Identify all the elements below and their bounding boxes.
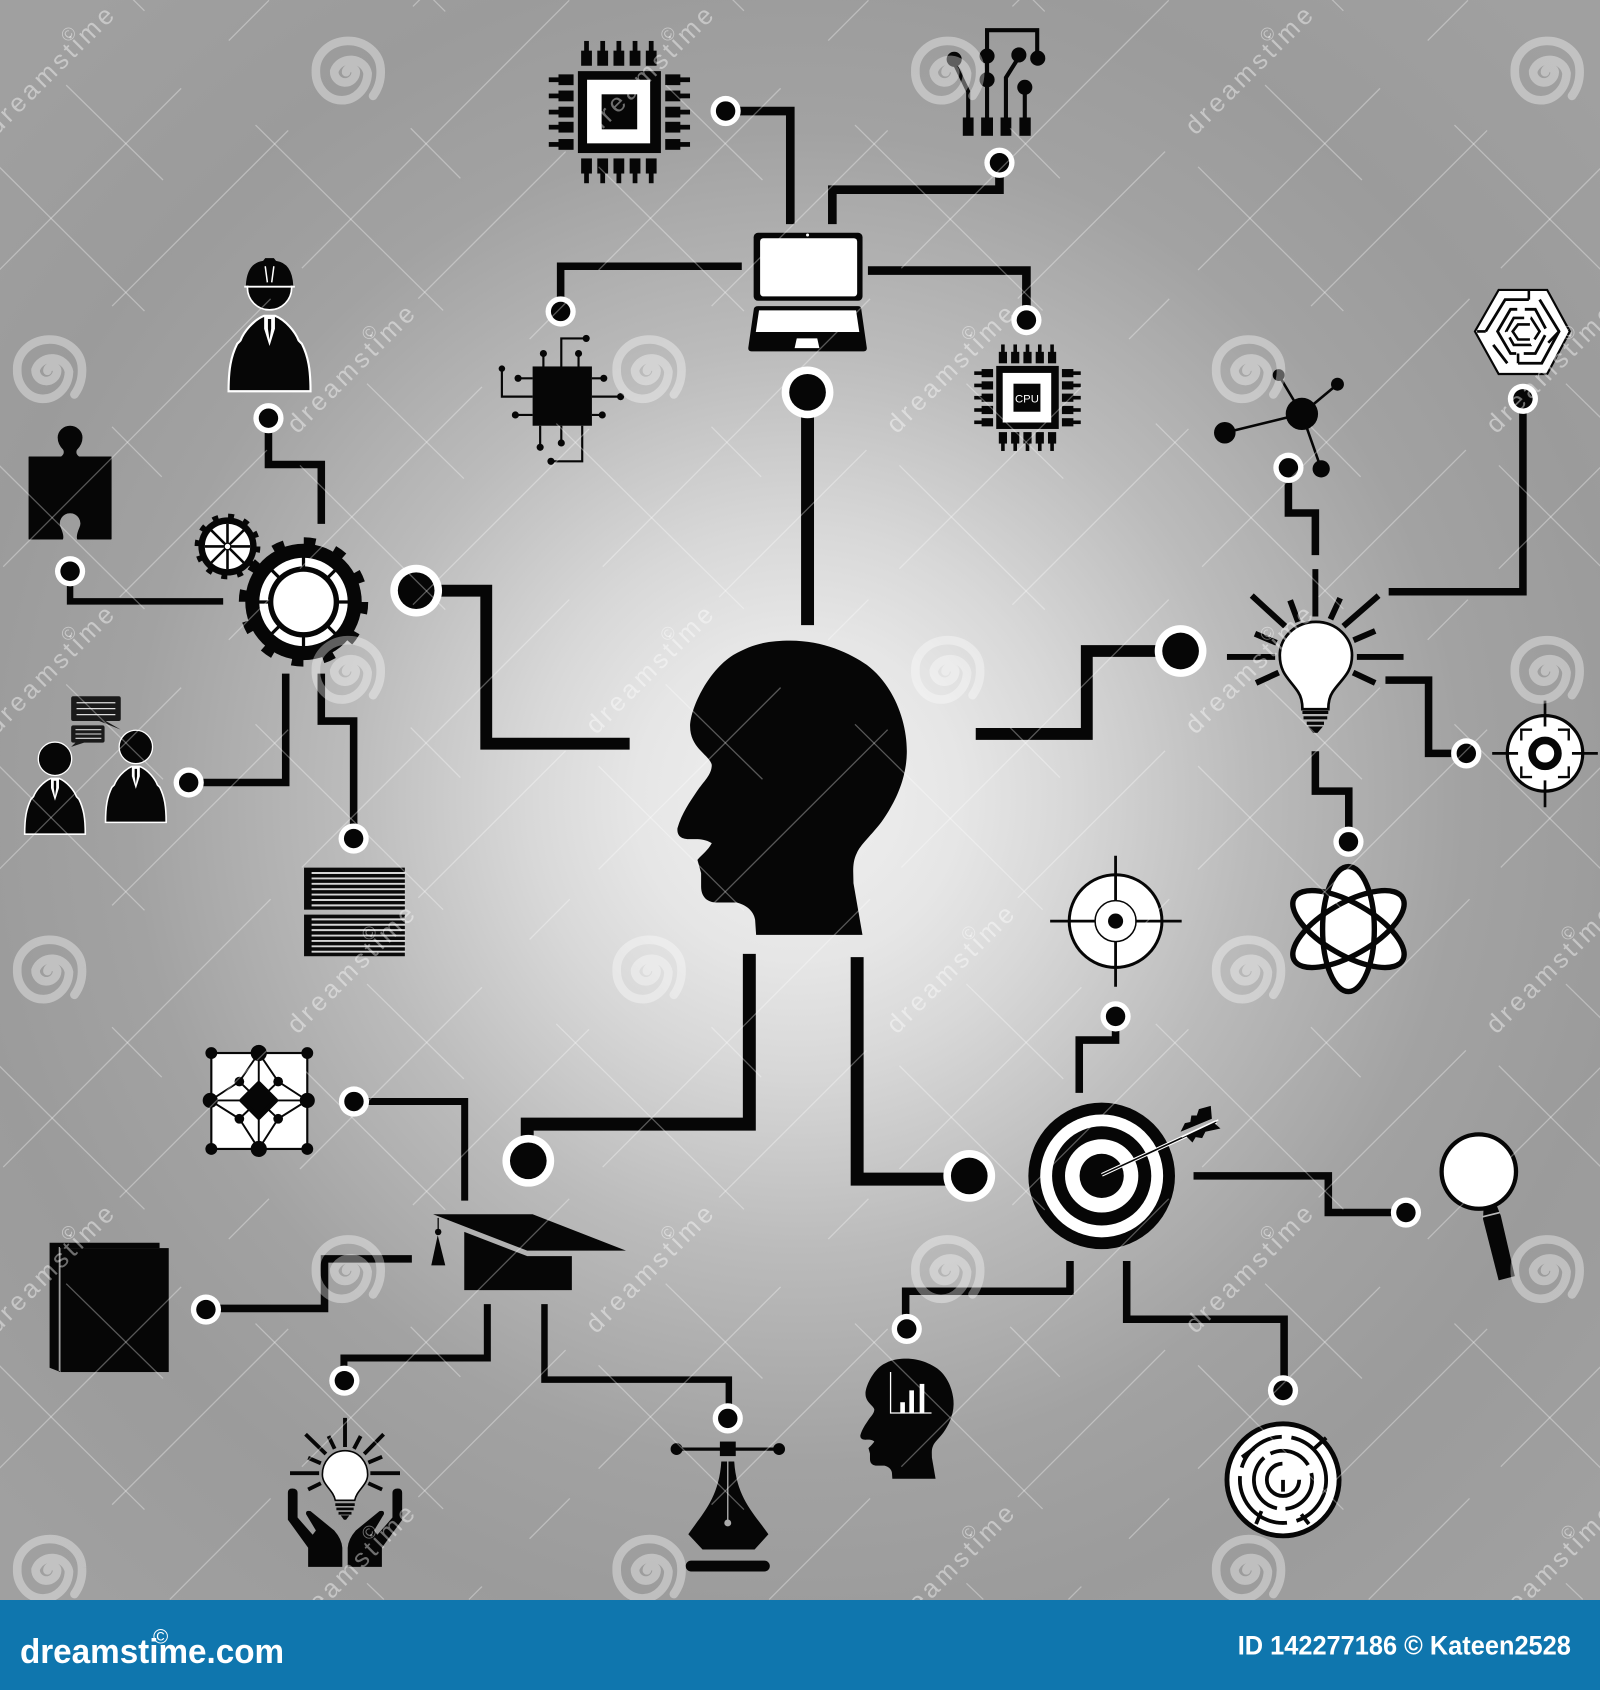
icon: crosshair (1050, 856, 1182, 987)
icon: CPU chip: CPU (1015, 394, 1039, 406)
icon: head with bar chart (860, 1359, 954, 1479)
watermark: dreamstime text: © (656, 1220, 680, 1245)
icon: two people talking (25, 696, 166, 834)
icon: atom (1281, 867, 1416, 992)
icon: CPU chip (974, 344, 1081, 451)
icon: engineer with hard hat (229, 258, 311, 391)
watermark: dreamstime text: © (357, 920, 382, 945)
watermark: dreamstime text: © (1255, 621, 1280, 645)
watermark: dreamstime text: © (1255, 1220, 1280, 1245)
watermark: dreamstime text: dreamstime (881, 1500, 1020, 1638)
graduation cap connectors (191, 1086, 743, 1433)
main connector: head to laptop (782, 366, 833, 625)
laptop connectors (546, 96, 1042, 335)
watermark: dreamstime text: © (956, 920, 981, 945)
icon: bullseye with arrow (1028, 1103, 1220, 1249)
watermark: dreamstime text: dreamstime (282, 300, 421, 439)
watermark: dreamstime text: © (656, 21, 680, 46)
icon: processor with nodes (499, 335, 624, 465)
icon: large microchip (549, 41, 690, 183)
icon: atomic lattice (203, 1045, 315, 1157)
icon: circuit board traces (947, 30, 1045, 136)
icon: fountain pen nib (671, 1442, 785, 1571)
watermark: dreamstime text: dreamstime (581, 2, 719, 140)
watermark: dreamstime text: © (357, 1519, 382, 1544)
main connector: head to light bulb (976, 625, 1206, 734)
icon: magnifying glass (1442, 1134, 1516, 1280)
watermark: dreamstime text: © (956, 320, 981, 345)
icon: closed book (50, 1243, 169, 1372)
watermark: dreamstime text: dreamstime (1180, 2, 1319, 140)
gear connectors (55, 403, 369, 854)
watermark: dreamstime text: dreamstime (1180, 1200, 1319, 1339)
icon: idea light bulb with rays (1227, 569, 1404, 733)
watermark: dreamstime text: © (1556, 1519, 1581, 1544)
watermark: dreamstime text: dreamstime (282, 900, 421, 1039)
watermark: dreamstime text: © (56, 21, 81, 46)
footer credit: ID 142277186 © Kateen2528 (1238, 1630, 1571, 1660)
watermark: dreamstime text: © (1556, 920, 1581, 945)
watermark: dreamstime text: © (357, 320, 382, 345)
icon: molecule (1214, 369, 1344, 477)
watermark: dreamstime text: © (56, 621, 81, 645)
footer bar (0, 1600, 1600, 1690)
icon: puzzle piece (29, 426, 111, 539)
watermark: dreamstime text: dreamstime (881, 300, 1020, 439)
watermark: dreamstime text: dreamstime (581, 1200, 719, 1339)
icon: stacked books (304, 868, 405, 956)
icon: gears (197, 516, 364, 663)
footer logo mark: © (153, 1626, 168, 1649)
watermark: dreamstime text: © (1556, 320, 1581, 345)
watermark: dreamstime text: © (656, 621, 680, 645)
watermark: dreamstime text: dreamstime (581, 601, 719, 739)
main connector: head to bullseye (857, 957, 995, 1202)
icon: hands holding light bulb (288, 1418, 402, 1567)
watermark: dreamstime text: dreamstime (881, 900, 1020, 1039)
icon: target reticle (1492, 701, 1598, 807)
watermark: dreamstime text: © (1255, 21, 1280, 46)
watermark: dreamstime text: dreamstime (282, 1500, 421, 1638)
central head silhouette (677, 641, 907, 935)
main connector: head to graduation cap (502, 954, 749, 1187)
footer logo: dreamstime.com (20, 1633, 284, 1671)
main connector: head to gears (390, 565, 630, 744)
watermark: dreamstime text: dreamstime (1180, 601, 1319, 739)
icon: laptop (748, 233, 867, 351)
light bulb connectors (1273, 384, 1538, 857)
watermark: dreamstime text: © (56, 1220, 81, 1245)
icon: circular maze (1227, 1424, 1339, 1536)
watermark: dreamstime text: © (956, 1519, 981, 1544)
bullseye connectors (892, 1001, 1421, 1405)
icon: graduation cap (431, 1214, 626, 1290)
icon: hexagon maze (1475, 290, 1570, 374)
